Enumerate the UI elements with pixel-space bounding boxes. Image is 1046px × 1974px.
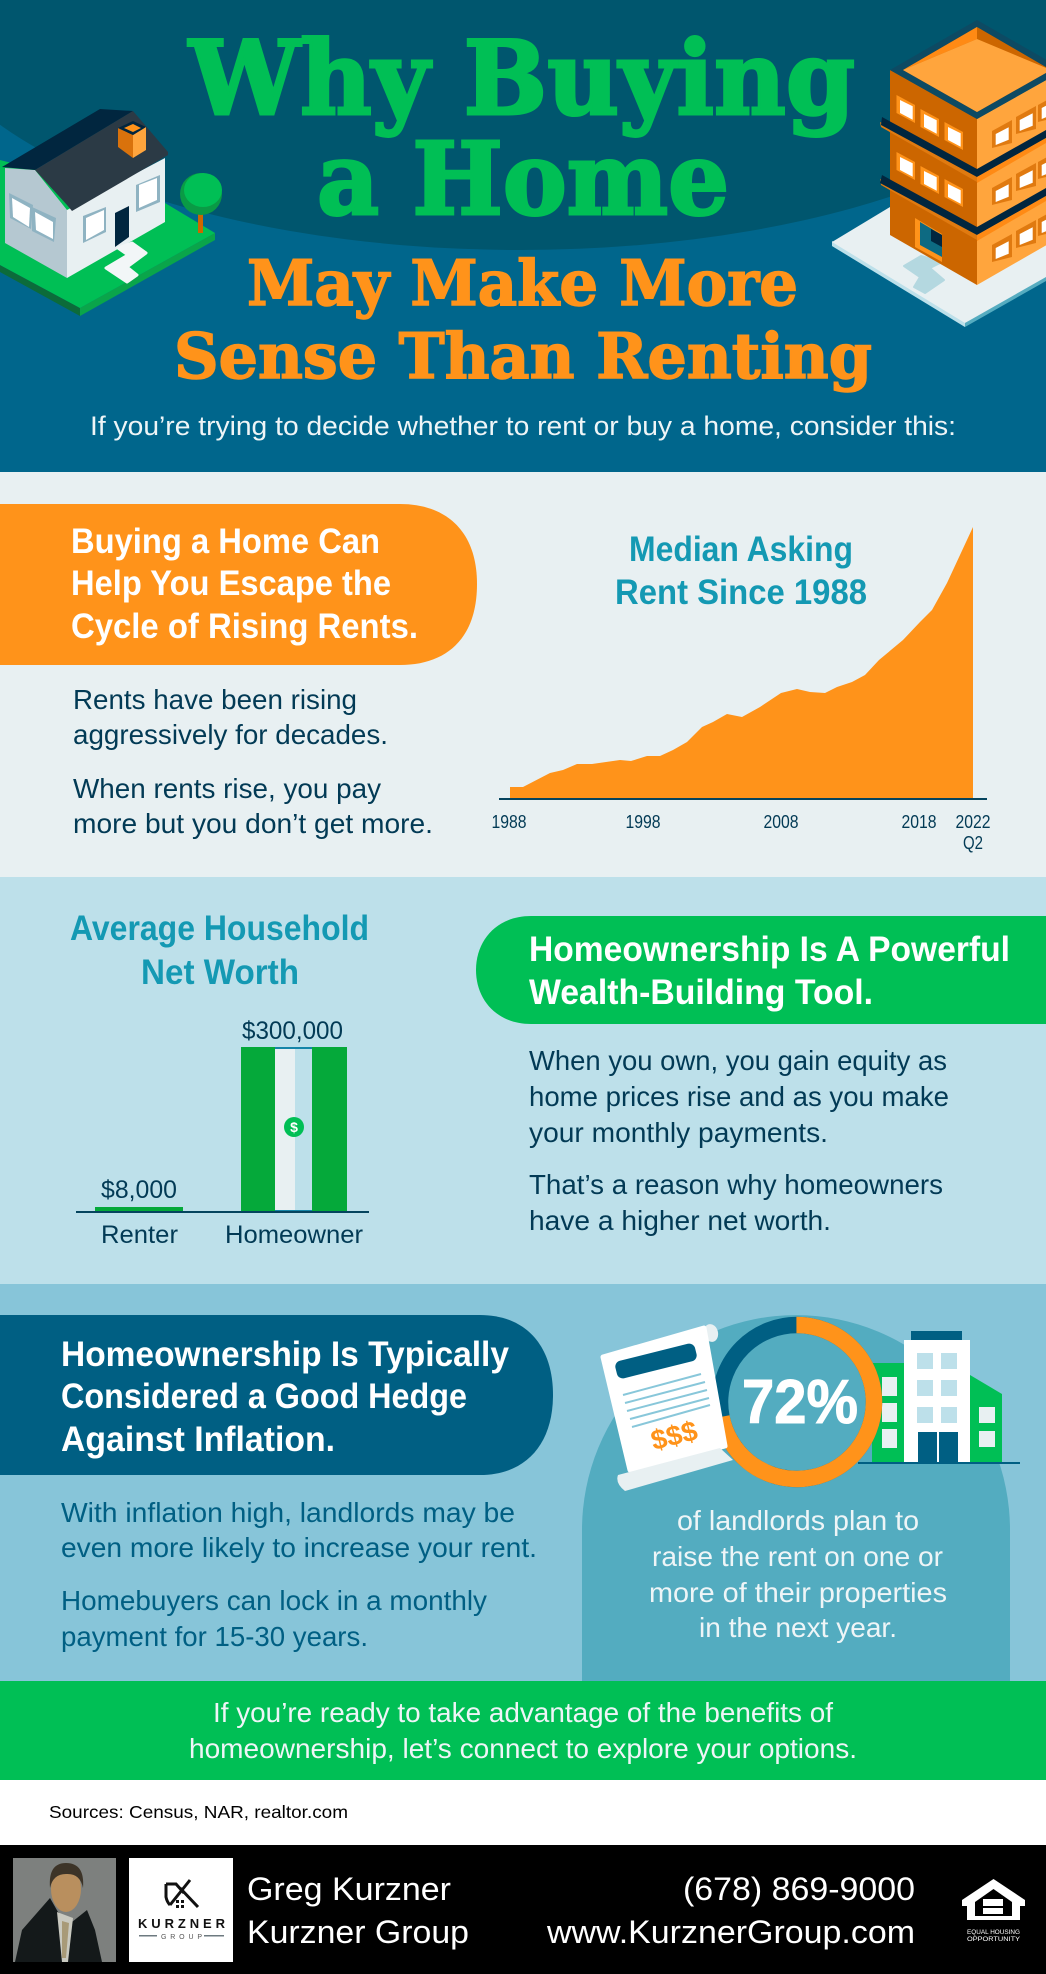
area chart: median asking rent: Q2 bbox=[963, 833, 983, 853]
bar chart: net worth: $300,000 bbox=[242, 1017, 343, 1045]
heading pill: wealth-building tool: Homeownership Is A Powerful bbox=[529, 930, 1010, 969]
heading pill: hedge against inflation: Against Inflation. bbox=[61, 1420, 335, 1459]
contact details: (678) 869-9000 bbox=[683, 1871, 915, 1907]
footer bar bbox=[0, 1845, 1046, 1974]
body text: inflation: even more likely to increase your rent. bbox=[61, 1532, 537, 1563]
icon: equal housing opportunity: EQUAL HOUSING bbox=[967, 1929, 1020, 1936]
body text: rents rising bbox=[73, 684, 433, 839]
heading pill: hedge against inflation: Considered a Good Hedge bbox=[61, 1377, 467, 1416]
icon: apartment building illustration bbox=[832, 20, 1046, 327]
body text: equity: That’s a reason why homeowners bbox=[529, 1169, 943, 1200]
area chart: median asking rent: 2008 bbox=[764, 812, 798, 832]
chart title: median asking rent bbox=[615, 530, 867, 612]
subtitle: May Make More Sense Than Renting: May Make More bbox=[247, 246, 798, 320]
stat caption: raise the rent on one or bbox=[652, 1541, 943, 1572]
area chart: median asking rent: 1998 bbox=[626, 812, 660, 832]
heading pill: escape rising rents: Help You Escape the bbox=[71, 564, 391, 603]
agent name: Greg Kurzner bbox=[247, 1871, 451, 1907]
bar chart: net worth: $8,000 bbox=[101, 1176, 177, 1204]
chart title: median asking rent: Median Asking bbox=[629, 530, 853, 569]
body text: equity: your monthly payments. bbox=[529, 1117, 828, 1148]
body text: equity: have a higher net worth. bbox=[529, 1205, 831, 1236]
area chart: median asking rent: 2022 bbox=[956, 812, 990, 832]
panel: inflation hedge bbox=[0, 1284, 1046, 1681]
donut chart: 72%: 72% bbox=[742, 1368, 858, 1437]
company logo: GROUP bbox=[161, 1934, 202, 1941]
call to action band bbox=[0, 1681, 1046, 1780]
icon: equal housing opportunity: OPPORTUNITY bbox=[967, 1936, 1021, 1943]
bar chart: net worth: $ bbox=[290, 1119, 298, 1135]
chart title: average household net worth: Net Worth bbox=[141, 953, 299, 992]
body text: equity: home prices rise and as you make bbox=[529, 1081, 949, 1112]
icon: rent document bbox=[603, 1323, 733, 1491]
panel: wealth building bbox=[0, 877, 1046, 1284]
call to action band: homeownership, let’s connect to explore your options. bbox=[189, 1733, 857, 1764]
contact details: www.KurznerGroup.com bbox=[546, 1914, 915, 1950]
chart title: average household net worth: Average Household bbox=[70, 909, 369, 948]
title: Why Buying a Home: a Home bbox=[317, 120, 729, 238]
sources: Sources: Census, NAR, realtor.com bbox=[49, 1802, 348, 1822]
company logo: KURZNER bbox=[138, 1916, 226, 1931]
icon: office buildings bbox=[858, 1331, 1020, 1464]
panel: rising rents bbox=[0, 472, 1046, 877]
heading pill: wealth-building tool: Wealth-Building Tool. bbox=[529, 973, 873, 1012]
agent name bbox=[247, 1871, 469, 1950]
heading pill: hedge against inflation: Homeownership Is Typically bbox=[61, 1335, 510, 1374]
body text: rents rising: When rents rise, you pay bbox=[73, 773, 381, 804]
heading pill: escape rising rents: Buying a Home Can bbox=[71, 522, 380, 561]
sources bbox=[0, 1780, 1046, 1845]
call to action band: If you’re ready to take advantage of the benefits of bbox=[213, 1697, 833, 1728]
subtitle: May Make More Sense Than Renting bbox=[174, 246, 872, 393]
body text: equity: When you own, you gain equity as bbox=[529, 1045, 947, 1076]
body text: inflation: With inflation high, landlords may be bbox=[61, 1497, 515, 1528]
heading pill: escape rising rents bbox=[0, 504, 477, 665]
icon: house illustration bbox=[0, 109, 222, 316]
stat caption bbox=[649, 1505, 947, 1643]
panel: header bbox=[0, 0, 1046, 472]
body text: rents rising: aggressively for decades. bbox=[73, 719, 388, 750]
bar chart: net worth bbox=[76, 1017, 369, 1249]
donut chart: 72% bbox=[720, 1325, 874, 1479]
heading pill: wealth-building tool bbox=[476, 916, 1046, 1024]
subtitle: May Make More Sense Than Renting: Sense Than Renting bbox=[174, 319, 872, 393]
heading pill: escape rising rents: Cycle of Rising Rents. bbox=[71, 607, 418, 646]
area chart: median asking rent bbox=[492, 527, 990, 853]
body text: equity bbox=[529, 1045, 949, 1236]
body text: inflation: payment for 15-30 years. bbox=[61, 1621, 368, 1652]
bar chart: net worth: Homeowner bbox=[225, 1221, 363, 1249]
stat caption: of landlords plan to bbox=[677, 1505, 919, 1536]
area chart: median asking rent: 2018 bbox=[902, 812, 936, 832]
icon: rent document: $$$ bbox=[648, 1415, 701, 1456]
company logo bbox=[129, 1858, 233, 1962]
chart title: average household net worth bbox=[70, 909, 369, 992]
area chart: median asking rent: 1988 bbox=[492, 812, 526, 832]
icon: equal housing opportunity bbox=[962, 1879, 1025, 1943]
stat caption: in the next year. bbox=[699, 1612, 897, 1643]
stat caption: more of their properties bbox=[649, 1577, 947, 1608]
title: Why Buying a Home: Why Buying bbox=[188, 19, 855, 139]
intro text: If you’re trying to decide whether to rent or buy a home, consider this: bbox=[90, 411, 956, 441]
title: Why Buying a Home bbox=[188, 19, 855, 238]
arch panel: 72 percent of landlords bbox=[582, 1315, 1020, 1681]
chart title: median asking rent: Rent Since 1988 bbox=[615, 573, 867, 612]
contact details bbox=[546, 1871, 915, 1950]
body text: rents rising: Rents have been rising bbox=[73, 684, 357, 715]
agent name: Kurzner Group bbox=[247, 1914, 469, 1950]
bar chart: net worth: Renter bbox=[101, 1221, 178, 1249]
agent photo bbox=[13, 1858, 116, 1962]
body text: inflation: Homebuyers can lock in a monthly bbox=[61, 1585, 487, 1616]
heading pill: hedge against inflation bbox=[0, 1315, 553, 1475]
body text: rents rising: more but you don’t get more. bbox=[73, 808, 433, 839]
body text: inflation bbox=[61, 1497, 537, 1652]
